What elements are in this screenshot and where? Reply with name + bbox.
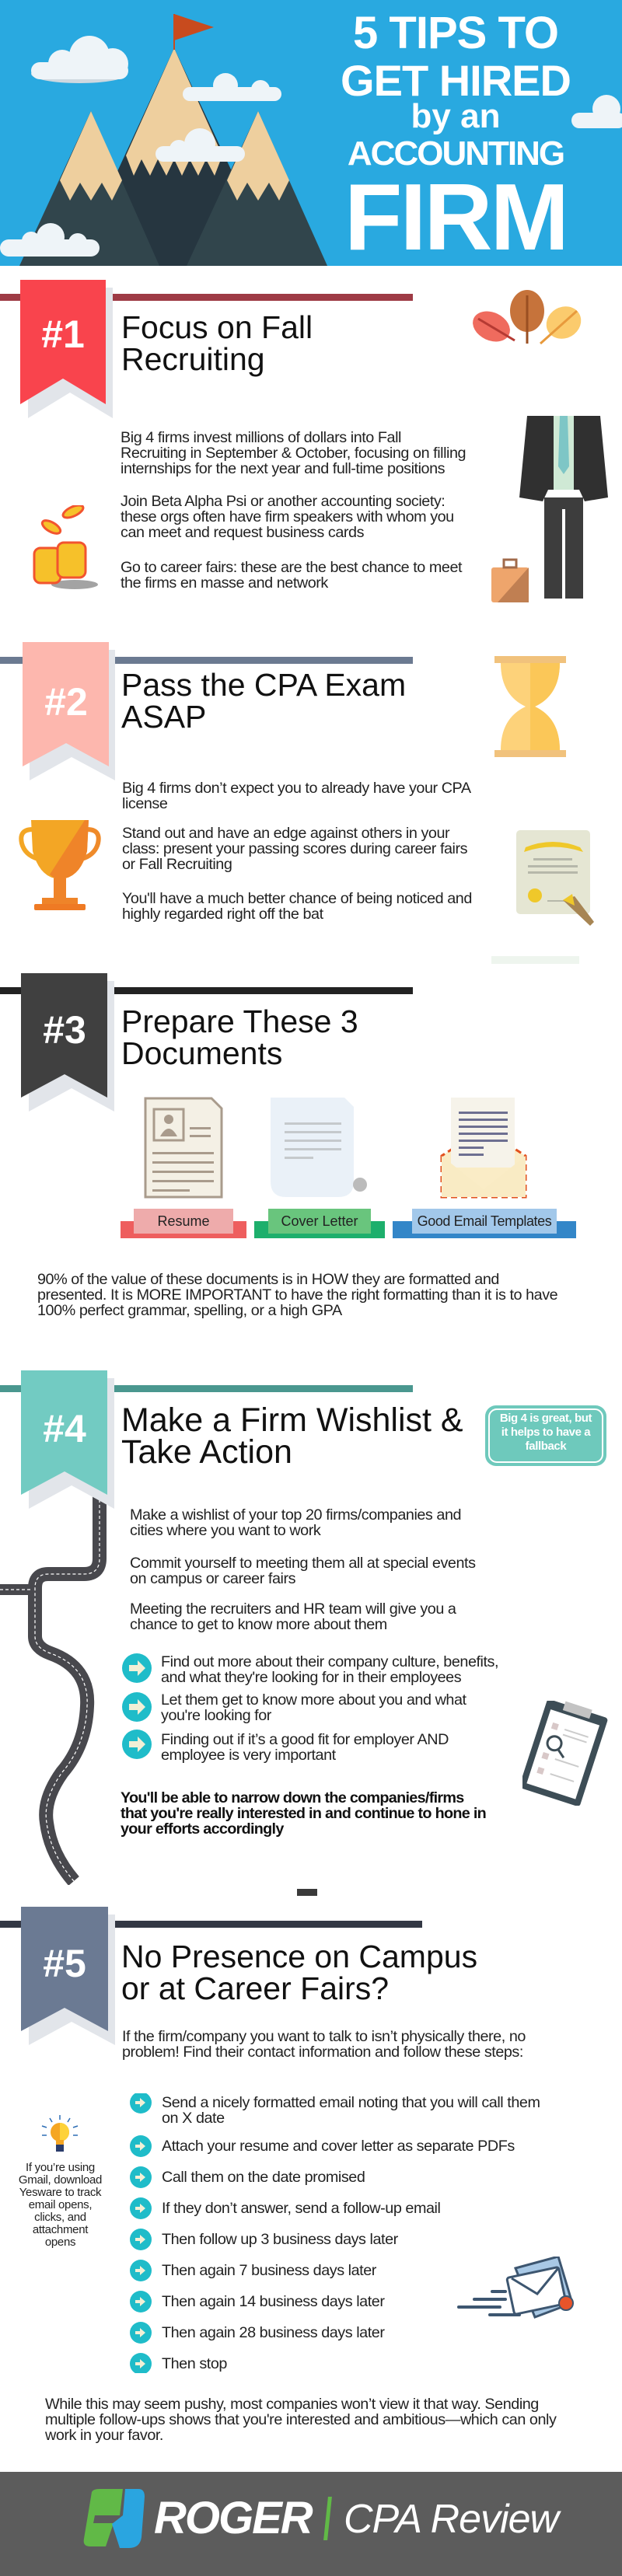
arrow list 4: Find out more about their company culture, benefits, bbox=[161, 1653, 498, 1670]
closing text 5: While this may seem pushy, most companies won’t view it that way. Sending bbox=[45, 2396, 539, 2413]
heading 4: Take Action bbox=[121, 1433, 292, 1471]
ribbon #4: #4 bbox=[43, 1407, 86, 1450]
heading 1: Focus on Fall bbox=[121, 309, 313, 345]
section 4: Commit yourself to meeting them all at special events bbox=[130, 1555, 476, 1572]
ribbon #3: #3 bbox=[43, 1008, 86, 1052]
section 2: highly regarded right off the bat bbox=[122, 906, 323, 923]
side tip text: Yesware to track bbox=[19, 2186, 101, 2199]
label: Resume: Resume bbox=[157, 1213, 210, 1229]
icon: leaves bbox=[473, 290, 582, 344]
text block 3 bbox=[37, 1271, 557, 1319]
section 1: Join Beta Alpha Psi or another accounting society: bbox=[121, 493, 445, 510]
side tip text: Gmail, download bbox=[19, 2173, 102, 2187]
closing text 5: work in your favor. bbox=[45, 2427, 163, 2444]
steps list bbox=[130, 2093, 540, 2373]
text block 2: license bbox=[122, 795, 167, 812]
heading 1 bbox=[121, 309, 313, 377]
text block 4 bbox=[130, 1506, 461, 1539]
section 5 bbox=[0, 1907, 574, 2444]
icon: hourglass bbox=[494, 656, 566, 757]
logo divider bbox=[323, 2497, 332, 2540]
section 4: chance to get to know more about them bbox=[130, 1616, 387, 1633]
text block 1: Recruiting in September & October, focusing on filling bbox=[121, 445, 466, 462]
section 1: Go to career fairs: these are the best chance to meet bbox=[121, 559, 462, 576]
heading 5: No Presence on Campus bbox=[121, 1939, 477, 1974]
text block 1 bbox=[121, 429, 466, 477]
heading 3: Prepare These 3 bbox=[121, 1004, 358, 1039]
icon: trophy bbox=[19, 820, 101, 910]
arrow list 4 bbox=[122, 1653, 498, 1764]
heading 5 bbox=[121, 1939, 477, 2006]
heading 1: Recruiting bbox=[121, 341, 265, 377]
section 1: can meet and request business cards bbox=[121, 524, 364, 541]
ribbon #5: #5 bbox=[43, 1942, 86, 1985]
intro text 5: If the firm/company you want to talk to isn’t physically there, no bbox=[122, 2028, 526, 2045]
steps list: Then stop bbox=[162, 2355, 227, 2372]
section 2: Stand out and have an edge against others in your bbox=[122, 825, 449, 842]
ribbon #5 bbox=[21, 1907, 115, 2045]
text block 2 bbox=[122, 780, 471, 812]
section 4: on campus or career fairs bbox=[130, 1570, 295, 1587]
text block 4: cities where you want to work bbox=[130, 1522, 320, 1539]
ribbon #4 bbox=[21, 1370, 114, 1509]
logo: R icon bbox=[82, 2489, 148, 2550]
side tip text: email opens, bbox=[29, 2198, 92, 2211]
ribbon #1 bbox=[20, 280, 113, 418]
section 4: Meeting the recruiters and HR team will give you a bbox=[130, 1600, 456, 1618]
section 3 bbox=[0, 973, 576, 1319]
ribbon #2: #2 bbox=[44, 680, 88, 724]
intro text 5 bbox=[122, 2028, 526, 2061]
section 1: these orgs often have firm speakers with whom you bbox=[121, 508, 454, 525]
icon: email envelope bbox=[440, 1098, 527, 1199]
label: Cover Letter: Cover Letter bbox=[281, 1213, 358, 1229]
heading 5: or at Career Fairs? bbox=[121, 1970, 389, 2006]
title: 5 TIPS TO bbox=[353, 8, 558, 58]
bold takeaway 4 bbox=[121, 1789, 486, 1838]
text block 3: presented. It is MORE IMPORTANT to have the right formatting than it is to have bbox=[37, 1286, 557, 1304]
side tip text: If you’re using bbox=[26, 2161, 95, 2174]
road bbox=[0, 1497, 107, 1885]
steps list: If they don’t answer, send a follow-up email bbox=[162, 2200, 440, 2217]
arrow list 4: Finding out if it’s a good fit for employer AND bbox=[161, 1731, 449, 1748]
ribbon #1: #1 bbox=[41, 312, 85, 356]
title: GET HIRED bbox=[341, 56, 571, 105]
title bbox=[341, 8, 571, 270]
text block 2: Big 4 firms don’t expect you to already have your CPA bbox=[122, 780, 471, 797]
steps list: on X date bbox=[162, 2110, 225, 2127]
section 2 bbox=[0, 642, 594, 964]
icon: resume bbox=[145, 1098, 222, 1199]
icon: certificate bbox=[516, 830, 594, 926]
heading 3: Documents bbox=[121, 1035, 282, 1071]
label: Good Email Templates: Good Email Templates bbox=[418, 1213, 551, 1229]
section 2: or Fall Recruiting bbox=[122, 856, 232, 873]
text block 3: 100% perfect grammar, spelling, or a high GPA bbox=[37, 1302, 342, 1319]
ribbon #2 bbox=[23, 642, 115, 780]
clouds bbox=[0, 36, 622, 257]
arrow list 4: Let them get to know more about you and what bbox=[161, 1691, 466, 1709]
arrow list 4: you're looking for bbox=[161, 1707, 271, 1724]
header banner bbox=[0, 0, 622, 266]
steps list: Then again 28 business days later bbox=[162, 2324, 384, 2341]
small icon bbox=[297, 1889, 317, 1896]
icon: lightbulb bbox=[42, 2115, 78, 2152]
flag bbox=[174, 14, 214, 50]
mountains bbox=[19, 48, 327, 266]
arrow list 4: employee is very important bbox=[161, 1747, 336, 1764]
title: FIRM bbox=[344, 164, 567, 270]
heading 4: Make a Firm Wishlist & bbox=[121, 1401, 463, 1439]
label: Resume bbox=[121, 1209, 246, 1238]
icon: coins bbox=[33, 505, 98, 589]
side tip text: clicks, and bbox=[34, 2211, 86, 2224]
text block 1: Big 4 firms invest millions of dollars into Fall bbox=[121, 429, 401, 446]
callout: fallback: it helps to have a bbox=[501, 1426, 590, 1439]
heading 3 bbox=[121, 1004, 358, 1071]
steps list: Then again 14 business days later bbox=[162, 2293, 384, 2310]
steps list: Call them on the date promised bbox=[162, 2169, 365, 2186]
callout: fallback: Big 4 is great, but bbox=[500, 1412, 592, 1425]
side tip text: attachment bbox=[33, 2223, 88, 2236]
bold takeaway 4: You'll be able to narrow down the companies/firms bbox=[121, 1789, 464, 1806]
text block 1: internships for the next year and full-time positions bbox=[121, 460, 445, 477]
bold takeaway 4: your efforts accordingly bbox=[121, 1820, 284, 1838]
heading 4 bbox=[121, 1401, 463, 1471]
title: ACCOUNTING bbox=[348, 134, 564, 173]
callout: fallback: fallback bbox=[526, 1440, 566, 1453]
heading 2: ASAP bbox=[121, 699, 206, 735]
text block 4: Make a wishlist of your top 20 firms/companies and bbox=[130, 1506, 461, 1524]
label: Good Email Templates bbox=[393, 1209, 576, 1238]
icon: suit bbox=[491, 416, 608, 602]
icon: cover letter bbox=[271, 1098, 367, 1197]
intro text 5: problem! Find their contact information and follow these steps: bbox=[122, 2044, 523, 2061]
footer bbox=[0, 2472, 622, 2576]
section 2: class: present your passing scores during career fairs bbox=[122, 840, 467, 857]
steps list: Then again 7 business days later bbox=[162, 2262, 376, 2279]
text block 3: 90% of the value of these documents is in HOW they are formatted and bbox=[37, 1271, 499, 1288]
closing text 5: multiple follow-ups shows that you're interested and ambitious—which can only bbox=[45, 2411, 556, 2428]
icon: clipboard bbox=[522, 1701, 608, 1806]
side tip text: opens bbox=[45, 2236, 75, 2249]
logo: CPA Review: CPA Review bbox=[344, 2497, 558, 2542]
steps list: Then follow up 3 business days later bbox=[162, 2231, 398, 2248]
arrow list 4: and what they're looking for in their employees bbox=[161, 1669, 461, 1686]
ribbon #3 bbox=[21, 973, 114, 1112]
callout: fallback bbox=[485, 1405, 606, 1466]
steps list: Attach your resume and cover letter as separate PDFs bbox=[162, 2138, 515, 2155]
title: by an bbox=[411, 97, 500, 135]
icon: sent email bbox=[457, 2257, 582, 2326]
logo: ROGER: ROGER bbox=[154, 2493, 312, 2543]
closing text 5 bbox=[45, 2396, 556, 2443]
side tip text bbox=[19, 2161, 102, 2249]
label: Cover Letter bbox=[254, 1209, 385, 1238]
steps list: Send a nicely formatted email noting that you will call them bbox=[162, 2094, 540, 2111]
section 4 bbox=[0, 1370, 608, 1838]
section 2: You'll have a much better chance of being noticed and bbox=[122, 890, 472, 907]
section 1: the firms en masse and network bbox=[121, 574, 328, 592]
bold takeaway 4: that you're really interested in and continue to hone in bbox=[121, 1805, 486, 1822]
section 1 bbox=[0, 280, 608, 602]
heading 2: Pass the CPA Exam bbox=[121, 667, 406, 703]
heading 2 bbox=[121, 667, 406, 735]
